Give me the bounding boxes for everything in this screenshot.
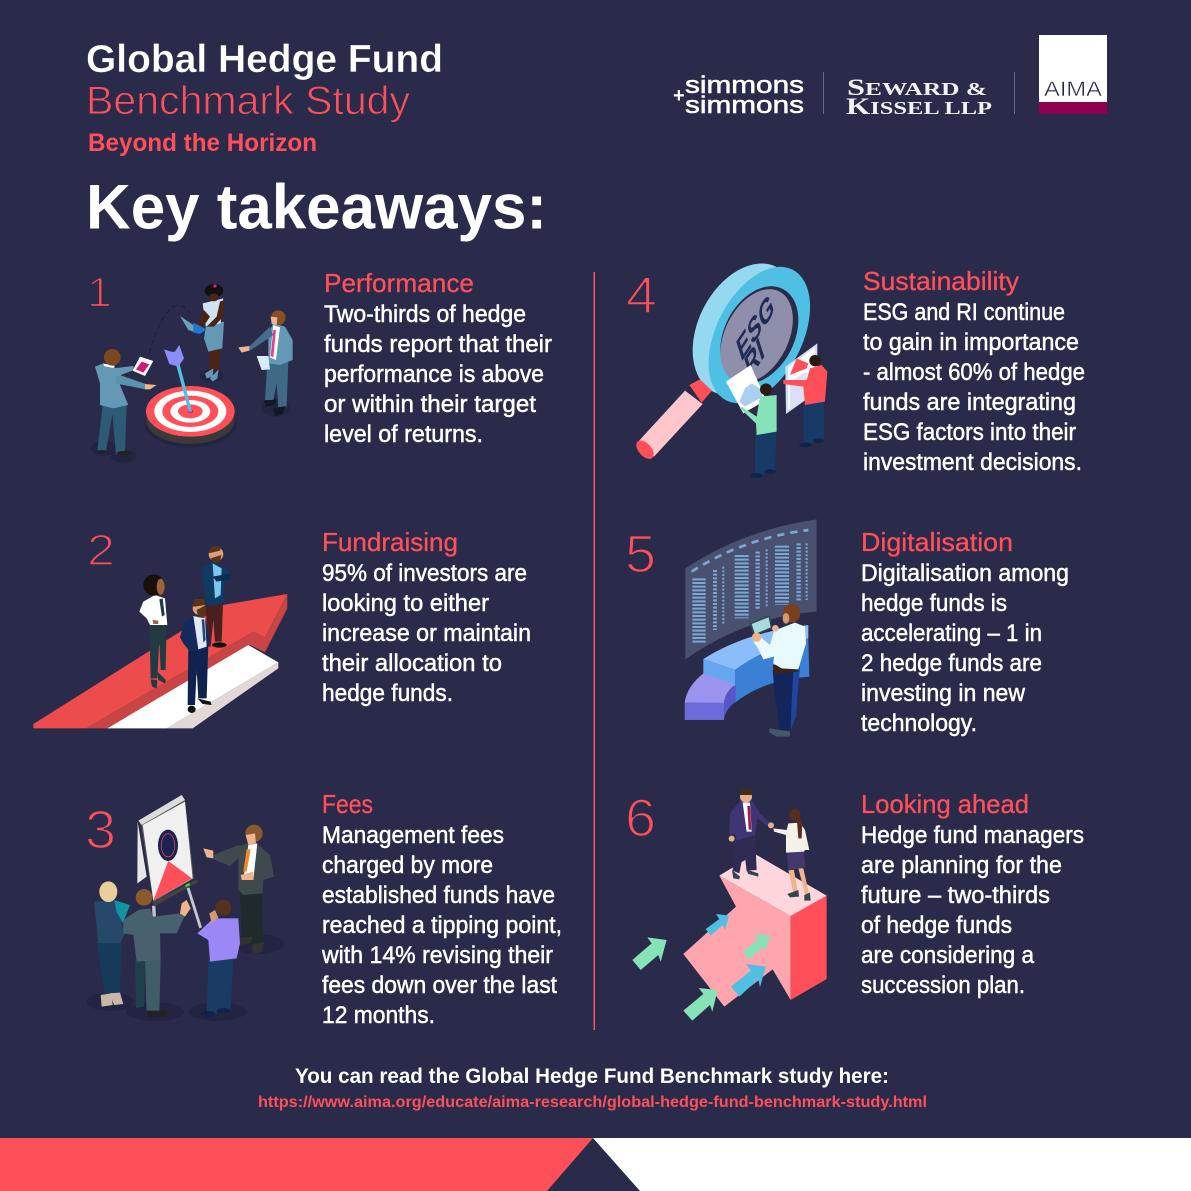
bottom colour band xyxy=(0,1138,1191,1191)
illustration: magnifying glass over ESG RI with two analysts xyxy=(633,246,831,478)
logo: Seward & Kissel LLP: K ISSEL LLP xyxy=(846,94,992,119)
body text: level of returns. xyxy=(324,421,483,448)
body text: their allocation to xyxy=(322,650,502,677)
title line 1: Global Hedge Fund xyxy=(86,38,443,81)
logo: simmons + simmons: simmons xyxy=(685,92,804,119)
panel: digitalisation xyxy=(625,519,1069,737)
logos xyxy=(673,35,1107,119)
body text: are considering a xyxy=(861,942,1035,969)
body text: Management fees xyxy=(322,822,504,849)
illustration: magnifying glass over ESG RI with two analysts: RI xyxy=(742,331,767,386)
body text: Digitalisation among xyxy=(861,560,1069,587)
body text: hedge funds is xyxy=(861,590,1007,617)
body text xyxy=(321,822,562,1029)
number 6: 6 xyxy=(625,789,656,848)
heading: Fundraising: Fundraising xyxy=(322,527,458,557)
panel: looking ahead xyxy=(625,789,1084,1021)
body text xyxy=(863,299,1085,476)
panel: fundraising xyxy=(33,526,531,728)
body text: funds are integrating xyxy=(863,389,1076,416)
body text: reached a tipping point, xyxy=(322,912,562,939)
body text: ESG factors into their xyxy=(863,419,1076,446)
body text: investment decisions. xyxy=(863,449,1082,476)
logo: Seward & Kissel LLP xyxy=(846,75,992,119)
body text xyxy=(861,822,1084,999)
footer text: You can read the Global Hedge Fund Benchmark study here: xyxy=(295,1065,889,1088)
logo: AIMA: AIMA xyxy=(1044,78,1102,101)
body text: increase or maintain xyxy=(322,620,531,647)
body text: to gain in importance xyxy=(863,329,1079,356)
body text: with 14% revising their xyxy=(321,942,553,969)
illustration: magnifying glass over ESG RI with two analysts: ESG xyxy=(734,287,777,369)
title line 2: Benchmark Study xyxy=(86,79,410,123)
number 2: 2 xyxy=(87,526,115,575)
body text: 12 months. xyxy=(322,1002,435,1029)
body text: hedge funds. xyxy=(322,680,453,707)
logo: AIMA xyxy=(1039,35,1107,114)
body text: looking to either xyxy=(322,590,489,617)
heading: Looking ahead: Looking ahead xyxy=(861,789,1029,819)
body text xyxy=(324,301,552,448)
body text xyxy=(861,560,1069,737)
panel: performance xyxy=(87,268,552,463)
body text: funds report that their xyxy=(324,331,552,358)
illustration: man with tablet at curved data screen xyxy=(685,519,817,737)
body text: are planning for the xyxy=(861,852,1062,879)
footer call to action xyxy=(258,1065,927,1111)
body text: or within their target xyxy=(324,391,536,418)
body text: Two-thirds of hedge xyxy=(324,301,526,328)
heading: Digitalisation: Digitalisation xyxy=(861,527,1013,557)
panel: fees xyxy=(85,789,562,1029)
body text: - almost 60% of hedge xyxy=(863,359,1085,386)
logo: simmons + simmons: + xyxy=(673,85,685,107)
illustration: presenter at flipchart with three colleagues xyxy=(86,795,284,1021)
number 1: 1 xyxy=(87,268,112,316)
body text: established funds have xyxy=(322,882,555,909)
body text: performance is above xyxy=(324,361,544,388)
heading: Performance: Performance xyxy=(324,268,474,298)
body text: technology. xyxy=(861,710,977,737)
body text: 2 hedge funds are xyxy=(861,650,1042,677)
body text: future – two-thirds xyxy=(861,882,1050,909)
body text: accelerating – 1 in xyxy=(861,620,1042,647)
body text: succession plan. xyxy=(861,972,1025,999)
body text: charged by more xyxy=(322,852,493,879)
heading: Key takeaways: Key takeaways: xyxy=(86,172,547,242)
heading: Sustainability: Sustainability xyxy=(863,266,1019,296)
logo: Seward & Kissel LLP: S EWARD & xyxy=(847,75,987,100)
body text xyxy=(322,560,531,707)
body text: Hedge fund managers xyxy=(861,822,1084,849)
body text: of hedge funds xyxy=(861,912,1012,939)
illustration: handshake on top of pink arrow xyxy=(632,789,827,1021)
heading: Fees: Fees xyxy=(322,789,373,819)
illustration: target and arrow with three people xyxy=(91,284,293,463)
body text: investing in new xyxy=(861,680,1026,707)
subtitle: Beyond the Horizon xyxy=(88,129,317,157)
illustration: people on a red and white arrow xyxy=(33,546,287,728)
panel: sustainability xyxy=(626,246,1085,478)
footer link: https://www.aima.org/educate/aima-research/global-hedge-fund-benchmark-study.html xyxy=(258,1094,927,1111)
logo: simmons + simmons: simmons xyxy=(685,72,804,99)
body text: 95% of investors are xyxy=(322,560,527,587)
logo: simmons + simmons xyxy=(673,72,804,119)
body text: ESG and RI continue xyxy=(863,299,1065,326)
number 4: 4 xyxy=(626,267,657,325)
body text: fees down over the last xyxy=(322,972,557,999)
number 3: 3 xyxy=(85,800,116,860)
title block xyxy=(86,38,443,157)
number 5: 5 xyxy=(625,525,656,584)
